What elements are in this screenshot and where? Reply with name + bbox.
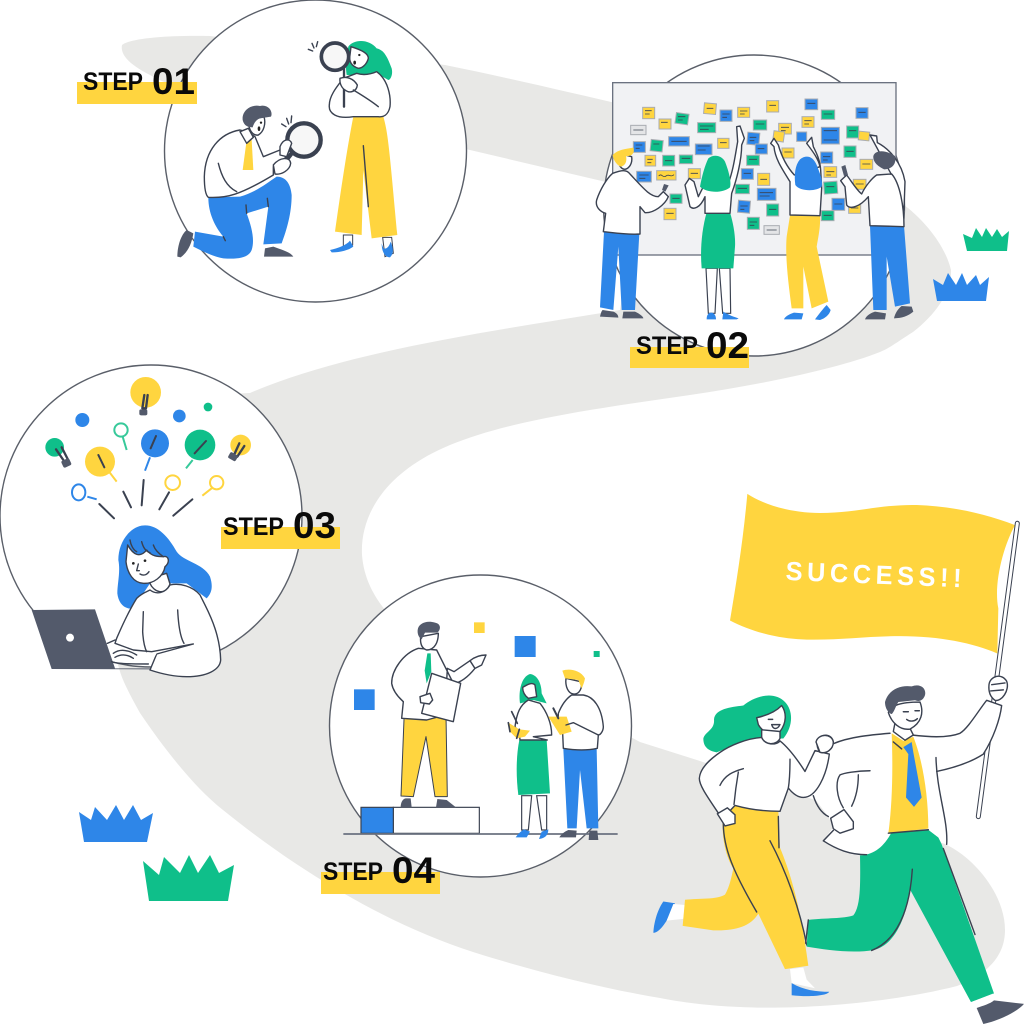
- ideas and woman at laptop: [32, 377, 251, 677]
- man runner: [806, 676, 1024, 1024]
- runners with flag: [653, 494, 1024, 1024]
- step 04 label: 04: [392, 850, 435, 891]
- icon: blue grass right: [933, 273, 989, 301]
- woman with blue hair: [32, 525, 221, 677]
- woman with magnifier: [308, 41, 397, 257]
- circle outline 04: [330, 575, 632, 877]
- step 03 label: STEP: [223, 513, 284, 541]
- person left: [596, 148, 669, 318]
- podium: [343, 807, 618, 834]
- icon: green grass top right: [963, 228, 1009, 251]
- step 01 label: [77, 61, 197, 104]
- step 04 label: STEP: [323, 858, 383, 886]
- flag: [730, 494, 1015, 653]
- step 04 label: [321, 850, 440, 894]
- panel: step 02 circle: [596, 55, 913, 356]
- woman runner: [653, 696, 833, 996]
- presentation scene: [343, 622, 618, 840]
- step 03 label: 03: [293, 505, 336, 546]
- board: [613, 83, 896, 255]
- person right: [841, 135, 913, 319]
- step 01 label: 01: [152, 61, 195, 102]
- panel: step 01 circle: [164, 0, 466, 302]
- floating squares: [354, 622, 600, 710]
- panel: step 03 circle: [0, 365, 302, 677]
- illustration: two people with magnifying glasses: [177, 41, 397, 259]
- panel: step 04 circle: [330, 575, 632, 877]
- idea bulbs and sparks: [45, 377, 251, 518]
- flag pole: [978, 523, 1017, 817]
- man kneeling: [177, 106, 321, 259]
- sticky notes: [631, 99, 873, 234]
- person green hair: [685, 126, 744, 319]
- circle outline 01: [164, 0, 466, 302]
- circle outline 02: [604, 55, 904, 356]
- step 02 label: 02: [706, 325, 749, 366]
- board with sticky notes and team: [596, 83, 913, 320]
- woman with notebook: [508, 674, 552, 839]
- step 01 label: STEP: [83, 68, 143, 96]
- icon: green grass left: [143, 855, 234, 901]
- presenter: [392, 622, 486, 807]
- person blue hair: [771, 137, 831, 320]
- man with notebook: [548, 670, 603, 840]
- flag text: SUCCESS!!: [785, 558, 962, 593]
- step 03 label: [221, 505, 340, 549]
- circle outline 03: [0, 365, 302, 667]
- step 02 label: STEP: [636, 332, 698, 360]
- step 02 label: [630, 325, 749, 368]
- icon: blue grass left: [79, 805, 153, 842]
- flag pole inner: [978, 523, 1017, 817]
